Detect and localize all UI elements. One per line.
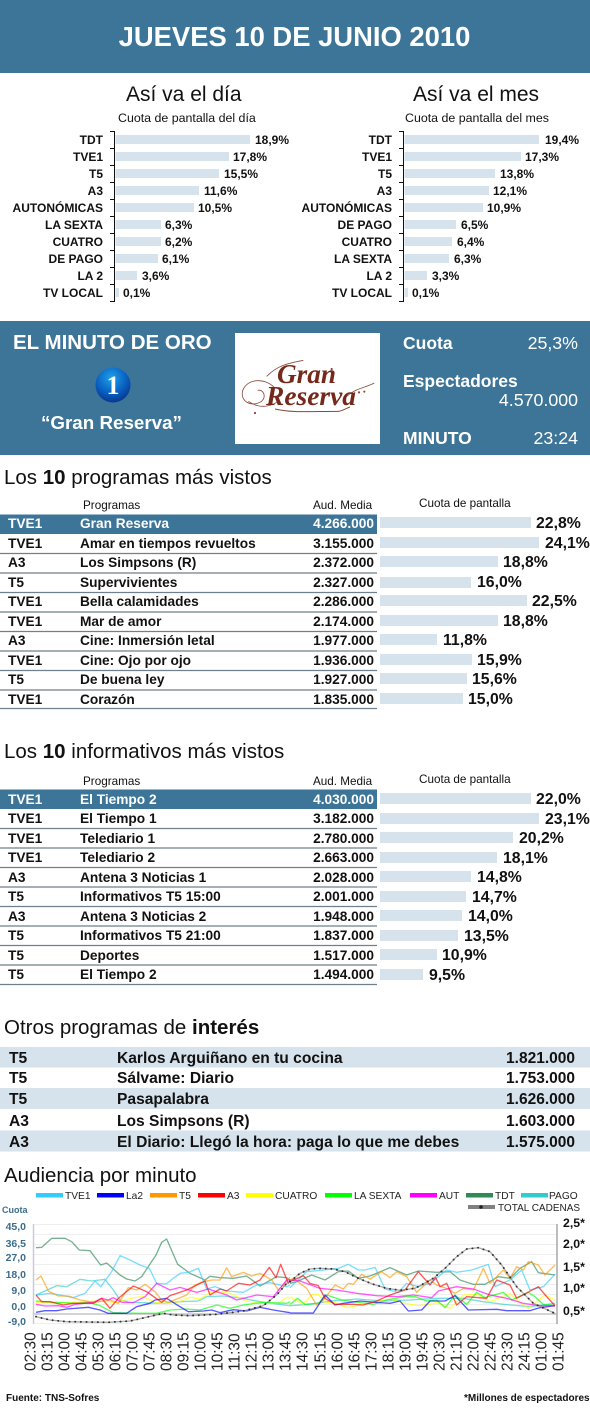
- bar chart: día: 6,1%: [162, 252, 190, 266]
- rows: Amar en tiempos revueltos: [80, 536, 256, 551]
- heading: los 10 informativos más vistos: Los 10 informativos más vistos: [4, 740, 284, 763]
- stats: cuota: 25,3%: [528, 333, 578, 353]
- time axis labels: 08:30: [158, 1332, 176, 1371]
- image: gran reserva logo: Gran: [277, 359, 336, 389]
- stats: cuota: [403, 333, 578, 353]
- series right half: [290, 1248, 555, 1313]
- bar chart: mes: CUATRO: [342, 235, 392, 249]
- rows: Antena 3 Noticias 2: [80, 909, 207, 924]
- time axis labels: 11:30: [226, 1333, 244, 1371]
- rows: 9,5%: [429, 967, 465, 984]
- time axis labels: 18:15: [380, 1332, 398, 1371]
- time axis labels: 13:45: [278, 1332, 294, 1371]
- table: otros programas: 1.821.000: [506, 1050, 575, 1067]
- chart legend: TVE1: [65, 1191, 91, 1202]
- bar chart: día: LA 2: [77, 269, 103, 283]
- bar chart: mes: 6,4%: [457, 235, 485, 249]
- highlighted row: [0, 790, 581, 809]
- rows: 16,0%: [477, 574, 522, 591]
- right axis labels: 2,0*: [563, 1237, 585, 1251]
- bar chart: día: DE PAGO: [49, 252, 103, 266]
- chart legend: La2: [126, 1191, 143, 1202]
- table: otros programas: 1.753.000: [506, 1070, 575, 1087]
- image: gran reserva logo: Reserva: [265, 381, 356, 411]
- stats: minuto: MINUTO: [403, 428, 472, 448]
- chart legend: A3: [227, 1191, 240, 1202]
- rows: T5: [8, 928, 24, 943]
- series left half: [36, 1238, 290, 1322]
- time axis labels: 04:45: [74, 1332, 90, 1371]
- left axis labels: 36,5: [6, 1238, 26, 1250]
- highlighted row: 4.030.000: [313, 792, 374, 807]
- left axis labels: Cuota: [2, 1205, 28, 1215]
- rows: 18,1%: [503, 850, 548, 867]
- rows: 1.927.000: [313, 672, 374, 687]
- chart legend: PAGO: [549, 1191, 578, 1202]
- stats: espectadores: [403, 371, 578, 410]
- rows: Los Simpsons (R): [80, 555, 196, 570]
- highlighted row: 4.266.000: [313, 516, 374, 531]
- table: otros programas: 1.626.000: [506, 1091, 575, 1108]
- time axis labels: 02:30: [22, 1332, 40, 1371]
- table: otros programas: El Diario: Llegó la hora: paga lo que me debes: [117, 1134, 460, 1151]
- bar chart: mes: DE PAGO: [338, 218, 392, 232]
- rows: A3: [8, 870, 26, 885]
- rows: T5: [8, 672, 24, 687]
- time axis labels: 23:30: [500, 1332, 516, 1371]
- bar chart: mes: T5: [378, 167, 392, 181]
- rows: 2.174.000: [313, 614, 374, 629]
- column headers: Programas: [83, 499, 140, 512]
- rows: 10,9%: [442, 947, 487, 964]
- panel: el minuto de oro: [0, 321, 590, 455]
- highlighted row: [0, 514, 581, 534]
- table: otros programas: [0, 1047, 590, 1152]
- rows: 3.155.000: [313, 536, 374, 551]
- highlighted row: 22,0%: [536, 791, 581, 808]
- chart legend: AUT: [439, 1191, 459, 1202]
- bar chart: día: LA SEXTA: [45, 218, 103, 232]
- rows: TVE1: [8, 594, 43, 609]
- bar chart: día: AUTONÓMICAS: [13, 200, 103, 215]
- rows: 1.835.000: [313, 692, 374, 707]
- left axis labels: 18,0: [6, 1269, 26, 1281]
- bar chart: día: 10,5%: [198, 201, 232, 215]
- left axis labels: [2, 1205, 28, 1328]
- rows: 1.494.000: [313, 967, 374, 982]
- rows: TVE1: [8, 653, 43, 668]
- rows: 1.948.000: [313, 909, 374, 924]
- line chart: audiencia por minuto: [2, 1205, 585, 1371]
- time axis labels: 01:45: [550, 1332, 568, 1371]
- subtitle: cuota del mes: Cuota de pantalla del mes: [405, 111, 549, 125]
- image: gran reserva logo: [235, 333, 380, 444]
- time axis labels: 07:00: [124, 1332, 142, 1371]
- time axis labels: 03:15: [40, 1332, 56, 1371]
- stats: minuto: 23:24: [534, 428, 578, 448]
- programme name: “Gran Reserva”: [41, 412, 182, 433]
- rows: TVE1: [8, 614, 43, 629]
- time axis labels: 20:30: [432, 1332, 448, 1371]
- time axis labels: 13:00: [260, 1332, 278, 1371]
- right axis labels: 2,5*: [563, 1216, 585, 1230]
- highlighted row: El Tiempo 2: [80, 792, 157, 807]
- rows: 15,0%: [468, 691, 513, 708]
- rows: 13,5%: [464, 928, 509, 945]
- footnote: *Millones de espectadores: [464, 1393, 590, 1404]
- stats: espectadores: 4.570.000: [499, 390, 578, 410]
- bar chart: día: T5: [89, 167, 103, 181]
- left axis labels: 9,0: [11, 1285, 26, 1297]
- bar chart: mes: 17,3%: [525, 150, 559, 164]
- rows: 2.663.000: [313, 850, 374, 865]
- right axis labels: 0,5*: [563, 1304, 585, 1318]
- grid and axes: [33, 1224, 557, 1324]
- left axis labels: 27,0: [6, 1252, 26, 1264]
- bar chart: mes: 0,1%: [412, 286, 440, 300]
- rows: Corazón: [80, 692, 135, 707]
- column headers: Cuota de pantalla: [419, 497, 511, 510]
- rows: [0, 535, 590, 708]
- rows: A3: [8, 555, 26, 570]
- bar chart: día: 6,3%: [165, 218, 193, 232]
- time axis labels: 16:45: [346, 1332, 364, 1371]
- time axis labels: 17:30: [364, 1332, 380, 1371]
- bar chart: mes: LA SEXTA: [334, 252, 392, 266]
- time axis labels: 06:15: [108, 1332, 124, 1371]
- table: otros programas: T5: [9, 1091, 28, 1108]
- bar chart: día: TV LOCAL: [43, 286, 103, 300]
- bar chart: mes: TV LOCAL: [332, 286, 392, 300]
- rows: 14,8%: [477, 869, 522, 886]
- column headers: Programas: [83, 775, 140, 788]
- rows: 20,2%: [519, 830, 564, 847]
- time axis labels: 15:15: [312, 1332, 330, 1371]
- bar chart: día: 11,6%: [204, 184, 238, 198]
- rows: 1.517.000: [313, 948, 374, 963]
- rows: Telediario 2: [80, 850, 155, 865]
- rows: El Tiempo 2: [80, 967, 157, 982]
- chart legend: T5: [179, 1191, 191, 1202]
- rows: Telediario 1: [80, 831, 155, 846]
- table: otros programas: A3: [9, 1134, 29, 1151]
- time axis labels: 22:00: [466, 1332, 482, 1371]
- rows: 2.327.000: [313, 575, 374, 590]
- rows: T5: [8, 967, 24, 982]
- heading: así va el mes: Así va el mes: [413, 83, 539, 106]
- time axis labels: 01:00: [534, 1332, 550, 1371]
- rows: 24,1%: [545, 535, 590, 552]
- time axis labels: 10:45: [210, 1332, 226, 1371]
- rows: 18,8%: [503, 613, 548, 630]
- time axis labels: 21:15: [448, 1332, 466, 1371]
- axis: mes: [399, 132, 404, 302]
- table: programas: [0, 497, 590, 708]
- bar chart: día: 18,9%: [255, 133, 289, 147]
- bar chart: día: TDT: [80, 133, 104, 147]
- time axis labels: 04:00: [56, 1332, 74, 1371]
- rows: 1.977.000: [313, 633, 374, 648]
- bar chart: día: 15,5%: [224, 167, 258, 181]
- stats: espectadores: Espectadores: [403, 371, 518, 391]
- highlighted row: TVE1: [8, 516, 43, 531]
- bar chart: mes: 13,8%: [500, 167, 534, 181]
- column headers: [83, 773, 511, 788]
- table: otros programas: 1.603.000: [506, 1113, 575, 1130]
- column headers: [83, 497, 511, 512]
- heading: así va el día: Así va el día: [126, 83, 242, 106]
- header banner: [0, 0, 590, 73]
- axis: día: [110, 132, 115, 302]
- rows: 1.837.000: [313, 928, 374, 943]
- left axis labels: -9,0: [8, 1316, 26, 1328]
- bar chart: mes: 3,3%: [432, 269, 460, 283]
- rows: El Tiempo 1: [80, 811, 157, 826]
- rows: 15,6%: [472, 671, 517, 688]
- table: otros programas: Sálvame: Diario: [117, 1070, 234, 1087]
- column headers: Aud. Media: [313, 775, 373, 788]
- rows: T5: [8, 575, 24, 590]
- rows: A3: [8, 909, 26, 924]
- left axis labels: 45,0: [6, 1221, 26, 1233]
- icon: la 1 logo: [96, 368, 130, 402]
- bar chart: mes: [302, 133, 579, 300]
- right axis labels: 1,5*: [563, 1260, 585, 1274]
- rows: [0, 811, 590, 984]
- rows: Cine: Inmersión letal: [80, 633, 215, 648]
- rows: Informativos T5 15:00: [80, 889, 221, 904]
- time axis labels: 05:30: [90, 1332, 108, 1371]
- bar chart: día: TVE1: [73, 150, 103, 164]
- bar chart: día: CUATRO: [53, 235, 103, 249]
- bar chart: día: 6,2%: [165, 235, 193, 249]
- bar chart: mes: 19,4%: [545, 133, 579, 147]
- stats: minuto: [403, 428, 578, 448]
- column headers: Aud. Media: [313, 499, 373, 512]
- time axis labels: 19:00: [398, 1332, 414, 1371]
- time axis labels: 22:45: [482, 1332, 500, 1371]
- rows: TVE1: [8, 850, 43, 865]
- chart legend: [36, 1191, 580, 1214]
- heading: audiencia por minuto: Audiencia por minuto: [4, 1164, 197, 1187]
- stats: cuota: Cuota: [403, 333, 453, 353]
- rows: 23,1%: [545, 811, 590, 828]
- chart legend: LA SEXTA: [354, 1191, 402, 1202]
- rows: Informativos T5 21:00: [80, 928, 221, 943]
- time axis labels: 07:45: [142, 1332, 158, 1371]
- left axis labels: 0,0: [11, 1301, 26, 1313]
- header banner: JUEVES 10 DE JUNIO 2010: [119, 21, 470, 52]
- time axis labels: [22, 1332, 568, 1371]
- rows: TVE1: [8, 692, 43, 707]
- time axis labels: 14:30: [294, 1332, 312, 1371]
- table: otros programas: Pasapalabra: [117, 1091, 209, 1108]
- table: otros programas: Karlos Arguiñano en tu cocina: [117, 1050, 343, 1067]
- rows: TVE1: [8, 536, 43, 551]
- rows: 2.372.000: [313, 555, 374, 570]
- rows: De buena ley: [80, 672, 165, 687]
- bar chart: mes: 6,3%: [454, 252, 482, 266]
- source note: Fuente: TNS-Sofres: [6, 1393, 100, 1404]
- bar chart: día: 0,1%: [123, 286, 151, 300]
- column headers: Cuota de pantalla: [419, 773, 511, 786]
- rows: 3.182.000: [313, 811, 374, 826]
- table: otros programas: T5: [9, 1050, 28, 1067]
- bar chart: mes: LA 2: [366, 269, 392, 283]
- rows: 11,8%: [443, 632, 487, 649]
- bar chart: mes: 10,9%: [487, 201, 521, 215]
- bar chart: día: 3,6%: [142, 269, 170, 283]
- rows: T5: [8, 889, 24, 904]
- bar chart: mes: TDT: [369, 133, 393, 147]
- icon: la 1 logo: 1: [106, 371, 120, 400]
- rows: TVE1: [8, 811, 43, 826]
- right axis labels: 1,0*: [563, 1281, 585, 1295]
- highlighted row: TVE1: [8, 792, 43, 807]
- rows: 2.780.000: [313, 831, 374, 846]
- time axis labels: 19:45: [414, 1332, 432, 1371]
- bar chart: día: A3: [88, 184, 103, 198]
- rows: 2.001.000: [313, 889, 374, 904]
- rows: Cine: Ojo por ojo: [80, 653, 191, 668]
- bar chart: mes: TVE1: [362, 150, 392, 164]
- rows: Mar de amor: [80, 614, 162, 629]
- time axis labels: 16:00: [330, 1332, 346, 1371]
- heading: el minuto de oro: EL MINUTO DE ORO: [13, 331, 212, 354]
- rows: Supervivientes: [80, 575, 178, 590]
- right axis labels: [563, 1216, 585, 1318]
- time axis labels: 10:00: [192, 1332, 210, 1371]
- highlighted row: 22,8%: [536, 515, 581, 532]
- heading: los 10 programas más vistos: Los 10 programas más vistos: [4, 466, 272, 489]
- bar chart: mes: 6,5%: [461, 218, 489, 232]
- table: otros programas: 1.575.000: [506, 1134, 575, 1151]
- rows: 14,0%: [468, 908, 513, 925]
- rows: Antena 3 Noticias 1: [80, 870, 207, 885]
- rows: T5: [8, 948, 24, 963]
- bar chart: mes: AUTONÓMICAS: [302, 200, 392, 215]
- rows: A3: [8, 633, 26, 648]
- highlighted row: Gran Reserva: [80, 516, 169, 531]
- bar chart: mes: A3: [377, 184, 392, 198]
- panel: así va el día: [13, 83, 289, 302]
- time axis labels: 24:15: [516, 1332, 534, 1371]
- table: informativos: [0, 773, 590, 984]
- table: otros programas: T5: [9, 1070, 28, 1087]
- chart legend: TDT: [495, 1191, 515, 1202]
- panel: así va el mes: [302, 83, 579, 302]
- chart legend: TOTAL CADENAS: [498, 1203, 580, 1214]
- table: otros programas: Los Simpsons (R): [117, 1113, 250, 1130]
- bar chart: mes: 12,1%: [493, 184, 527, 198]
- rows: 18,8%: [503, 554, 548, 571]
- rows: 15,9%: [477, 652, 522, 669]
- rows: Bella calamidades: [80, 594, 199, 609]
- time axis labels: 09:15: [176, 1332, 192, 1371]
- rows: 2.286.000: [313, 594, 374, 609]
- subtitle: cuota del día: Cuota de pantalla del día: [118, 111, 256, 125]
- bar chart: día: [13, 133, 289, 300]
- time axis labels: 12:15: [244, 1332, 260, 1371]
- rows: TVE1: [8, 831, 43, 846]
- rows: Deportes: [80, 948, 140, 963]
- bar chart: día: 17,8%: [233, 150, 267, 164]
- rows: 1.936.000: [313, 653, 374, 668]
- table: otros programas: A3: [9, 1113, 29, 1130]
- rows: 22,5%: [532, 593, 577, 610]
- heading: otros programas de interés: Otros programas de interés: [4, 1016, 259, 1039]
- rows: 14,7%: [472, 889, 517, 906]
- rows: 2.028.000: [313, 870, 374, 885]
- chart legend: CUATRO: [275, 1191, 317, 1202]
